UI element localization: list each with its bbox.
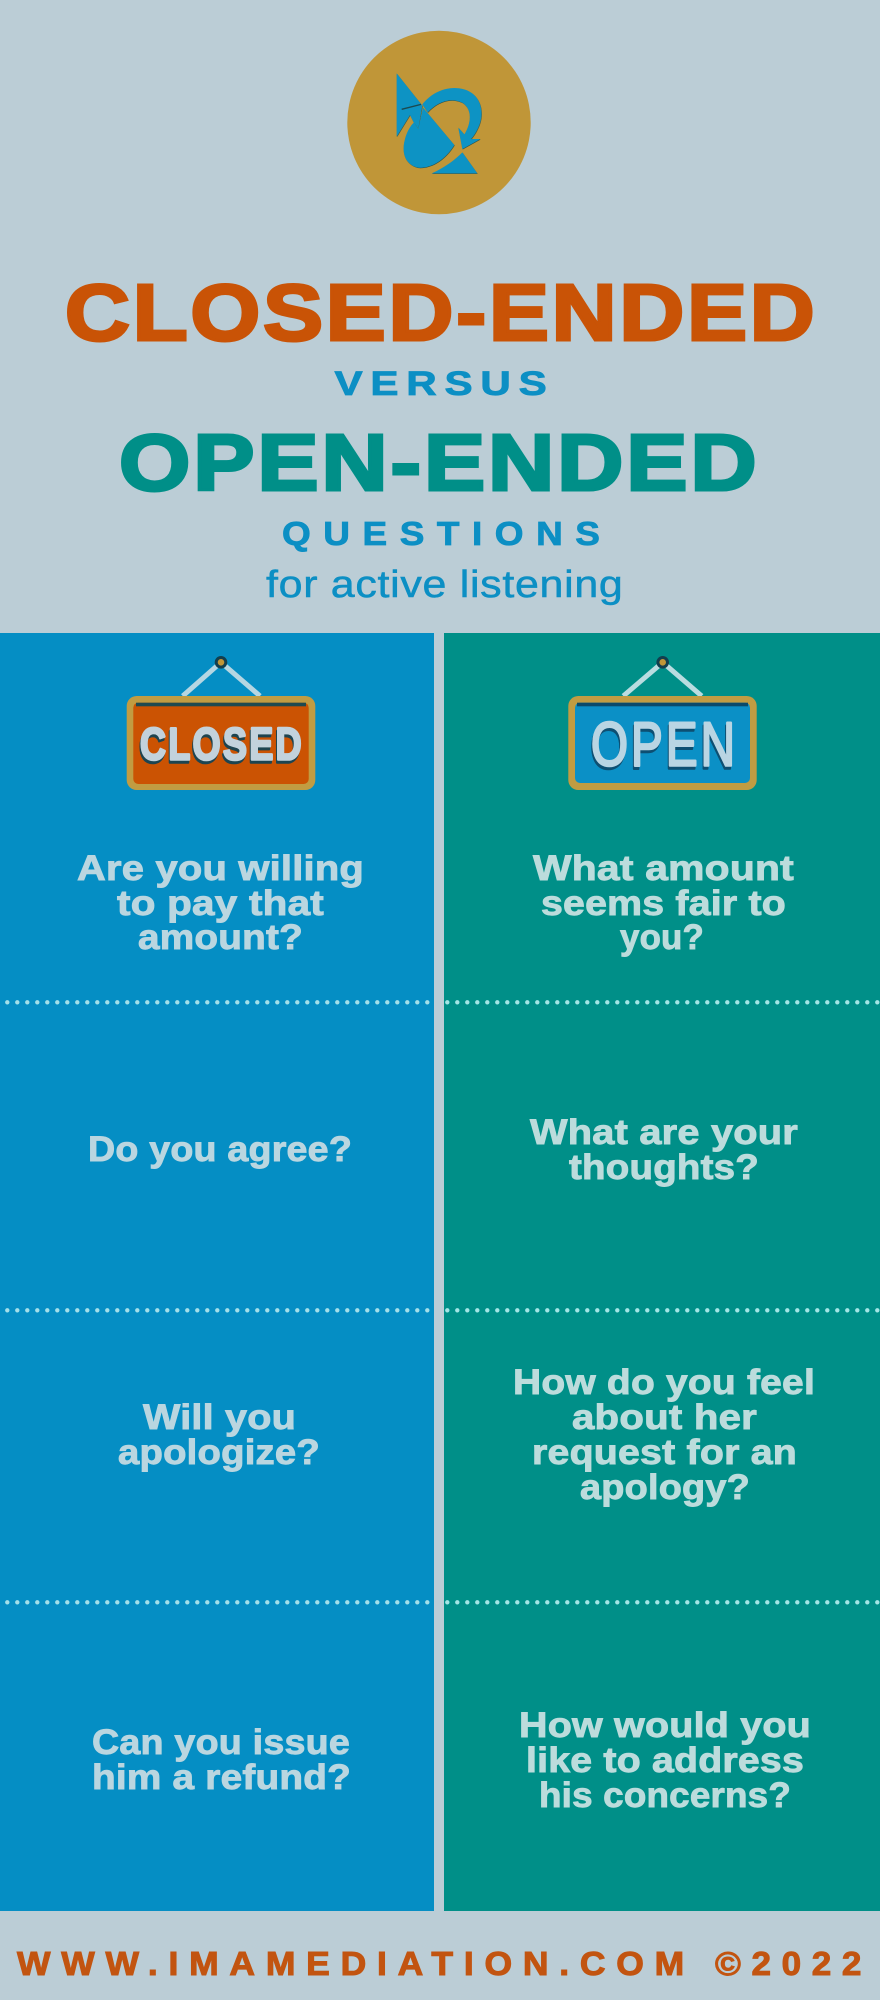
question: will you apologize: [118, 1398, 320, 1472]
title: open-ended: OPEN-ENDED: [119, 418, 760, 507]
question: will you apologize: apologize?: [118, 1433, 320, 1472]
question: feel about apology: How do you feel: [513, 1363, 815, 1402]
question: feel about apology: about her: [572, 1398, 757, 1437]
title: closed-ended: CLOSED-ENDED: [65, 268, 818, 357]
heading: versus: VERSUS: [334, 365, 554, 403]
question: what amount: What amount: [533, 849, 794, 888]
question: address concerns: his concerns?: [539, 1776, 791, 1815]
question: feel about apology: [513, 1363, 815, 1507]
panel: open questions: [444, 633, 880, 1911]
subtitle: for active listening: [266, 564, 624, 606]
question: what amount: [533, 849, 794, 957]
question: address concerns: [519, 1706, 811, 1815]
question: pay that amount: [77, 849, 364, 957]
question: what amount: seems fair to: [541, 884, 786, 923]
question: pay that amount: to pay that: [117, 884, 324, 923]
question: your thoughts: [530, 1113, 798, 1187]
question: pay that amount: Are you willing: [77, 849, 364, 888]
question: pay that amount: amount?: [138, 918, 303, 957]
icon: open sign: [568, 658, 757, 790]
question: issue a refund: him a refund?: [92, 1758, 351, 1797]
sign label: open: OPEN: [591, 710, 738, 780]
question: do you agree: Do you agree?: [88, 1130, 352, 1169]
question: feel about apology: apology?: [580, 1468, 750, 1507]
logo badge: [347, 31, 531, 214]
question: address concerns: like to address: [526, 1741, 804, 1780]
footer: website and copyright: WWW.IMAMEDIATION.COM: [17, 1945, 695, 1982]
question: address concerns: How would you: [519, 1706, 811, 1745]
footer: website and copyright: ©2022: [715, 1945, 872, 1982]
question: what amount: you?: [620, 918, 704, 957]
sign label: closed: CLOSED: [140, 718, 304, 770]
question: will you apologize: Will you: [143, 1398, 296, 1437]
panel: closed questions: [0, 633, 434, 1911]
question: issue a refund: Can you issue: [92, 1723, 350, 1762]
question: feel about apology: request for an: [532, 1433, 797, 1472]
question: your thoughts: thoughts?: [569, 1148, 759, 1187]
heading: questions: QUESTIONS: [282, 515, 612, 552]
question: your thoughts: What are your: [530, 1113, 798, 1152]
icon: closed sign: [127, 658, 315, 790]
question: issue a refund: [92, 1723, 351, 1797]
